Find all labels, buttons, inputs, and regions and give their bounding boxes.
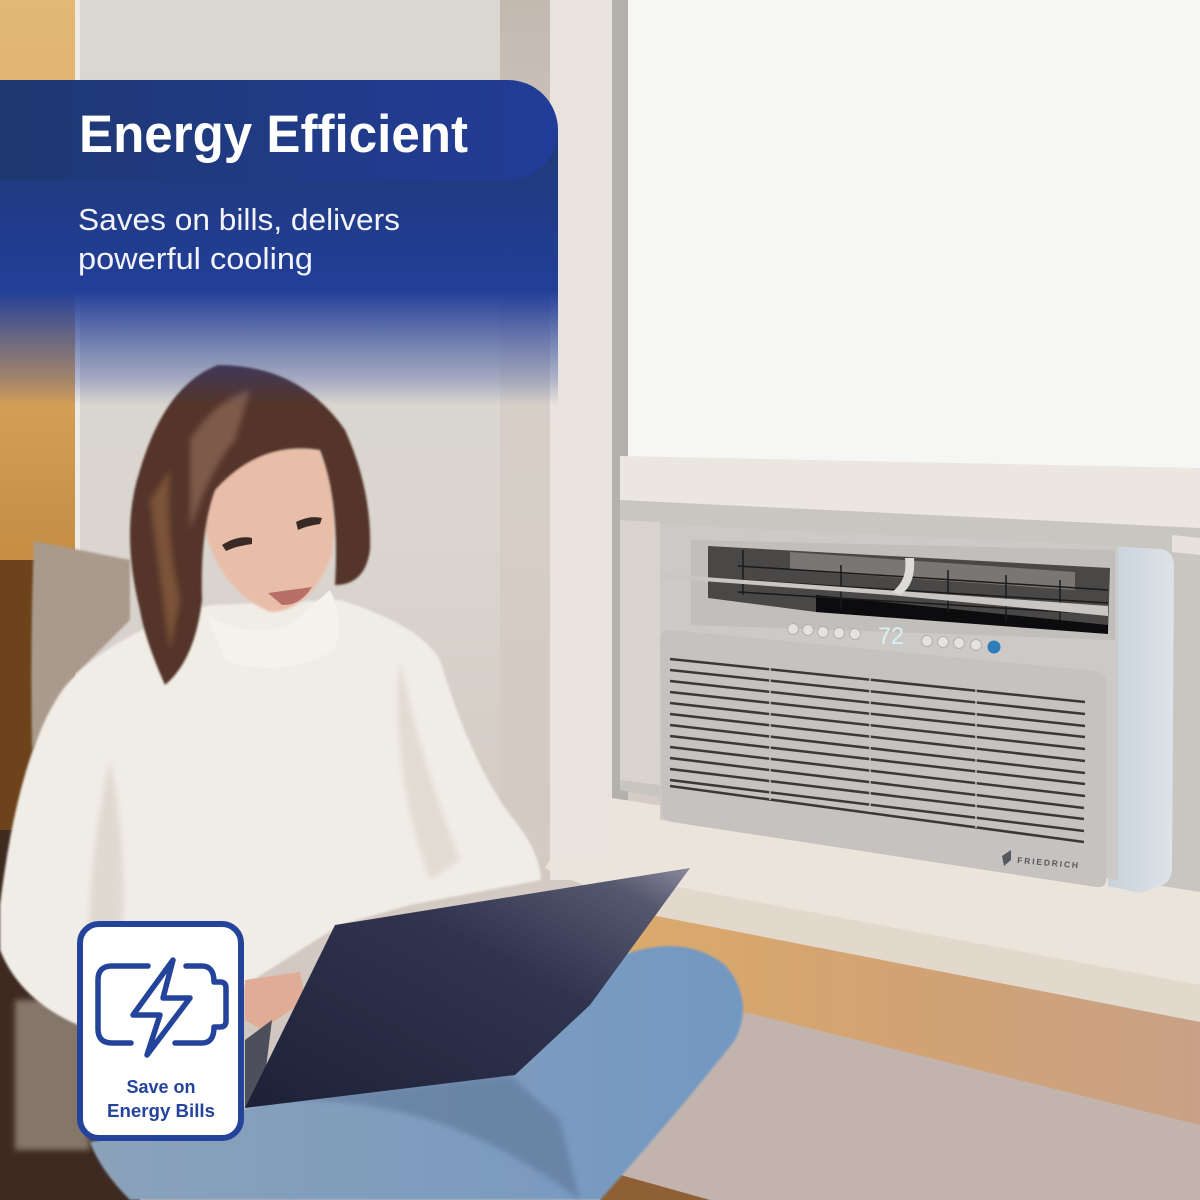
air conditioner	[660, 524, 1174, 893]
gradient panel	[0, 130, 558, 405]
badge: save on energy bills	[80, 924, 241, 1138]
control buttons left	[788, 624, 860, 640]
window frame and glass	[545, 0, 1200, 1022]
turtleneck	[207, 590, 339, 668]
subtitle	[78, 202, 400, 276]
subtitle: powerful cooling	[78, 241, 313, 276]
pillow	[31, 541, 130, 750]
badge label: Save on	[126, 1077, 196, 1097]
brand logo: FRIEDRICH	[1017, 855, 1078, 870]
louvers	[670, 655, 1085, 842]
title band	[0, 80, 558, 180]
side housing	[1108, 546, 1174, 893]
front grille panel	[660, 630, 1106, 887]
control buttons right	[922, 636, 982, 650]
hand	[245, 972, 305, 1030]
white sweater	[0, 600, 541, 1025]
woman	[0, 365, 743, 1200]
face	[205, 448, 334, 612]
badge label	[107, 1077, 215, 1121]
temperature display: 72	[878, 623, 904, 650]
subtitle: Saves on bills, delivers	[78, 202, 400, 237]
upper face	[660, 524, 1118, 880]
wooden window sill	[600, 905, 1200, 1200]
badge label: Energy Bills	[107, 1101, 215, 1121]
jeans	[90, 946, 743, 1200]
icon: battery with lightning bolt	[98, 960, 226, 1055]
title: Energy Efficient	[79, 105, 468, 164]
brand logo	[1002, 850, 1078, 870]
header panel	[0, 80, 558, 405]
power button	[988, 640, 1000, 654]
vent opening	[662, 540, 1115, 640]
laptop	[245, 868, 690, 1108]
hair	[130, 365, 370, 685]
